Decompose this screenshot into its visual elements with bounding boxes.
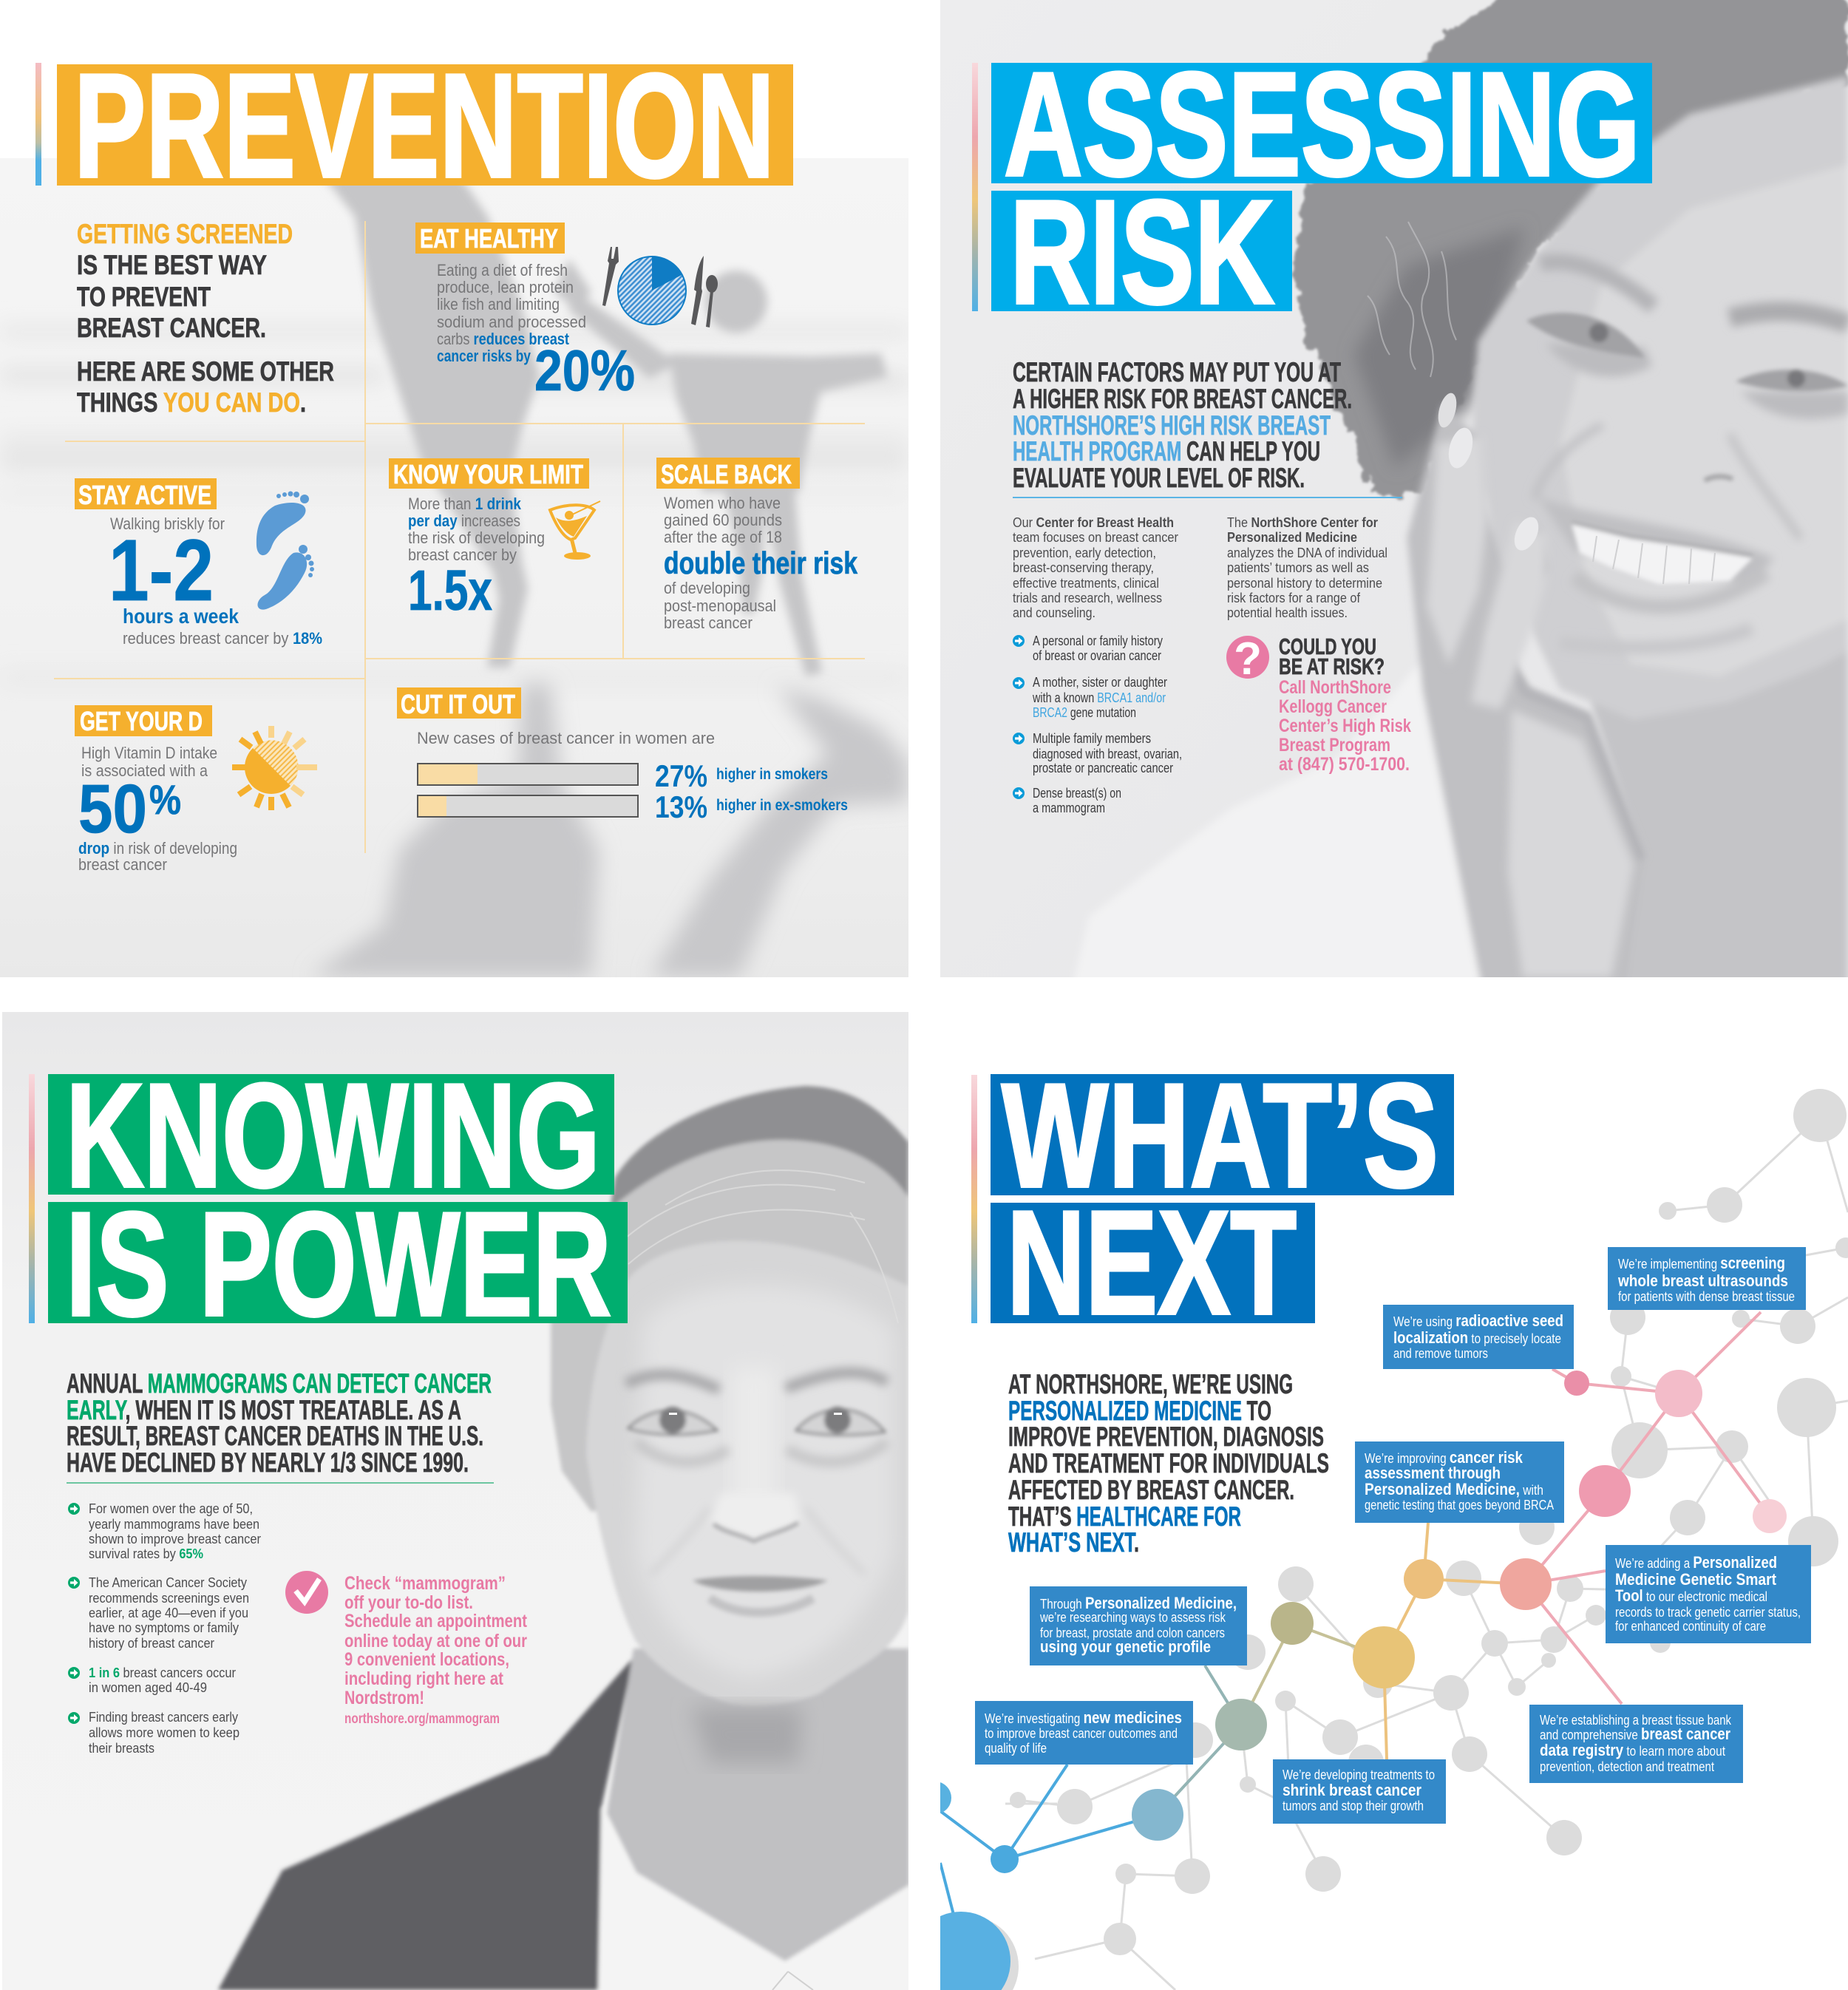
panel: knowing is power	[2, 1012, 909, 1990]
list: risk factors: Multiple family members	[1033, 731, 1151, 746]
callout: screening ultrasounds: whole breast ultrasounds	[1617, 1271, 1788, 1290]
callout: genetic profile	[1030, 1586, 1247, 1665]
heading: mammograms	[67, 1368, 494, 1484]
intro text: IS THE BEST WAY	[77, 250, 267, 280]
section: scale back: Women who have	[664, 494, 781, 512]
text: center for personalized medicine	[1227, 515, 1387, 620]
text: center for breast health: trials and research, wellness	[1013, 591, 1162, 605]
callout: genetic smart tool: for enhanced continuity of care	[1615, 1619, 1766, 1634]
photo: older woman portrait	[2, 1012, 909, 1990]
section: scale back: gained 60 pounds	[664, 511, 782, 529]
callout: genetic profile: we’re researching ways to assess risk	[1039, 1610, 1226, 1625]
list: risk factors: A mother, sister or daughter	[1033, 675, 1167, 690]
list: risk factors: BRCA2 gene mutation	[1033, 705, 1136, 720]
section: scale back: breast cancer	[664, 614, 753, 632]
section: stay active: STAY ACTIVE	[78, 480, 211, 510]
callout: radioactive seed: We’re using radioactive seed	[1393, 1311, 1563, 1330]
callout: genetic smart tool: records to track genetic carrier status,	[1615, 1605, 1801, 1620]
callout: new medicines: to improve breast cancer outcomes and	[985, 1726, 1178, 1741]
list: mammogram facts: The American Cancer Society	[89, 1575, 247, 1590]
section: stay active: hours a week	[123, 605, 239, 628]
callout: could you be at risk: Breast Program	[1279, 735, 1390, 755]
list: mammogram facts: For women over the age of 50,	[89, 1501, 253, 1516]
section: get your d: High Vitamin D intake	[81, 744, 217, 762]
section: know your limit: 1.5x	[408, 559, 492, 622]
section: cut it out: New cases of breast cancer in women are	[417, 729, 715, 747]
section: eat healthy: Eating a diet of fresh	[437, 261, 568, 279]
text: center for personalized medicine: The NorthShore Center for	[1227, 515, 1378, 530]
text: center for breast health: breast-conserving therapy,	[1013, 560, 1154, 575]
title: assessing risk	[972, 42, 1652, 335]
callout: radioactive seed: and remove tumors	[1393, 1346, 1488, 1361]
intro text: GETTING SCREENED	[77, 219, 293, 249]
bar chart: smokers and ex-smokers	[418, 764, 638, 817]
heading: personalized medicine: AND TREATMENT FOR INDIVIDUALS	[1008, 1448, 1329, 1478]
section: know your limit: breast cancer by	[408, 546, 517, 564]
panel: assessing risk	[940, 0, 1848, 991]
icon: footprints	[257, 491, 314, 610]
list: mammogram facts: recommends screenings even	[89, 1591, 249, 1606]
section: cut it out: CUT IT OUT	[401, 689, 515, 719]
callout: could you be at risk: BE AT RISK?	[1279, 653, 1385, 679]
callout: data registry: data registry to learn more about	[1540, 1741, 1725, 1759]
callout: data registry: prevention, detection and treatment	[1540, 1759, 1714, 1774]
heading: personalized medicine: PERSONALIZED MEDICINE TO	[1008, 1396, 1271, 1426]
callout: cancer risk assessment: We’re improving cancer risk	[1365, 1448, 1523, 1467]
section: cut it out: 27%	[655, 758, 707, 793]
section: stay active	[75, 478, 322, 648]
callout: radioactive seed	[1383, 1305, 1574, 1369]
callout: schedule a mammogram	[285, 1571, 528, 1727]
heading: risk factors: A HIGHER RISK FOR BREAST CANCER.	[1013, 384, 1352, 414]
callout: genetic profile: Through Personalized Medicine,	[1040, 1594, 1237, 1612]
list: mammogram facts: shown to improve breast cancer	[89, 1532, 261, 1546]
list: mammogram facts: 1 in 6 breast cancers occur	[89, 1665, 236, 1680]
section: eat healthy	[415, 223, 718, 403]
title: knowing is power: IS POWER	[66, 1182, 611, 1347]
list: risk factors: of breast or ovarian cancer	[1033, 648, 1161, 663]
intro text: TO PREVENT	[77, 282, 211, 312]
text: center for breast health: prevention, early detection,	[1013, 546, 1156, 560]
icon: sun	[232, 726, 317, 810]
callout: genetic smart tool: We’re adding a Personalized	[1615, 1553, 1777, 1572]
heading: risk factors: NORTHSHORE’S HIGH RISK BREAST	[1013, 410, 1331, 441]
heading: personalized medicine: WHAT’S NEXT.	[1008, 1527, 1139, 1558]
text: center for breast health: Our Center for Breast Health	[1013, 515, 1174, 530]
callout: new medicines: quality of life	[985, 1741, 1047, 1756]
list: risk factors: prostate or pancreatic cancer	[1033, 761, 1173, 775]
heading: personalized medicine: AFFECTED BY BREAST CANCER.	[1008, 1475, 1294, 1505]
callout: screening ultrasounds	[1608, 1247, 1806, 1310]
section: eat healthy: 20%	[534, 338, 635, 403]
list: mammogram facts: survival rates by 65%	[89, 1546, 203, 1561]
section: eat healthy: sodium and processed	[437, 313, 586, 331]
text: center for breast health: effective treatments, clinical	[1013, 576, 1159, 591]
icon: plate with fork, knife and spoon	[602, 247, 718, 327]
section: cut it out: 13%	[655, 789, 707, 824]
intro text: BREAST CANCER.	[77, 313, 266, 343]
list: mammogram facts: Finding breast cancers early	[89, 1710, 238, 1725]
section: eat healthy: carbs reduces breast	[437, 330, 570, 348]
section: cut it out: higher in ex-smokers	[716, 797, 848, 814]
section: eat healthy: EAT HEALTHY	[420, 223, 558, 254]
callout: shrink breast cancer: tumors and stop their growth	[1283, 1799, 1424, 1813]
title: what's next	[971, 1053, 1454, 1345]
list: risk factors: Dense breast(s) on	[1033, 786, 1121, 801]
text: center for personalized medicine: personal history to determine	[1227, 576, 1382, 591]
callout: schedule a mammogram: Nordstrom!	[344, 1688, 424, 1708]
panel: what's next	[911, 1053, 1848, 1990]
list: mammogram facts: earlier, at age 40—even if you	[89, 1606, 248, 1620]
section: know your limit: KNOW YOUR LIMIT	[393, 459, 583, 489]
callout: shrink breast cancer	[1273, 1759, 1446, 1824]
callout: radioactive seed: localization to precisely locate	[1393, 1328, 1561, 1347]
list: mammogram facts	[68, 1501, 261, 1756]
list: risk factors: diagnosed with breast, ovarian,	[1033, 747, 1182, 761]
callout: schedule a mammogram: northshore.org/mammogram	[344, 1711, 500, 1727]
heading: mammograms: HAVE DECLINED BY NEARLY 1/3 SINCE 1990.	[67, 1447, 469, 1478]
list: risk factors: with a known BRCA1 and/or	[1032, 690, 1166, 705]
callout: schedule a mammogram: 9 convenient locations,	[344, 1649, 509, 1670]
section: know your limit: the risk of developing	[408, 529, 545, 547]
text: center for personalized medicine: patients’ tumors as well as	[1227, 560, 1369, 575]
callout: cancer risk assessment	[1355, 1441, 1564, 1523]
callout: data registry: and comprehensive breast cancer	[1540, 1725, 1730, 1743]
list: risk factors: a mammogram	[1033, 801, 1105, 815]
section: stay active: Walking briskly for	[110, 515, 225, 533]
text: center for personalized medicine: potential health issues.	[1227, 605, 1348, 620]
section: get your d: GET YOUR D	[80, 706, 203, 736]
callout: could you be at risk	[1226, 634, 1411, 775]
heading: risk factors: EVALUATE YOUR LEVEL OF RISK.	[1013, 463, 1305, 493]
text: center for personalized medicine: Personalized Medicine	[1227, 530, 1357, 545]
heading: risk factors: HEALTH PROGRAM CAN HELP YOU	[1013, 436, 1320, 466]
heading: mammograms: RESULT, BREAST CANCER DEATHS IN THE U.S.	[67, 1421, 483, 1451]
callout: genetic smart tool	[1606, 1545, 1811, 1643]
heading: personalized medicine: THAT’S HEALTHCARE FOR	[1008, 1501, 1241, 1532]
text: center for breast health: and counseling.	[1013, 605, 1095, 620]
callout: genetic profile: for breast, prostate and colon cancers	[1040, 1626, 1225, 1640]
list: mammogram facts: have no symptoms or family	[89, 1620, 239, 1635]
callout: schedule a mammogram: Check “mammogram”	[344, 1573, 506, 1594]
photo: smiling woman	[940, 0, 1848, 991]
list: mammogram facts: yearly mammograms have been	[89, 1517, 259, 1532]
section: know your limit: More than 1 drink	[408, 495, 522, 513]
title: knowing is power: KNOWING	[66, 1053, 600, 1218]
section: get your d: breast cancer	[78, 855, 167, 874]
title: what's next: WHAT’S	[1002, 1053, 1438, 1218]
section: scale back: SCALE BACK	[661, 459, 792, 489]
callout: screening ultrasounds: for patients with dense breast tissue	[1618, 1289, 1795, 1304]
icon: martini glass	[550, 501, 600, 560]
list: risk factors	[1013, 634, 1182, 815]
list: mammogram facts: their breasts	[89, 1741, 154, 1756]
callout: shrink breast cancer: shrink breast cancer	[1283, 1781, 1421, 1799]
callout: schedule a mammogram: Schedule an appointment	[344, 1611, 528, 1631]
section: eat healthy: cancer risks by	[437, 347, 531, 365]
title: assessing risk: RISK	[1010, 170, 1274, 335]
intro text	[77, 219, 334, 418]
section: scale back: double their risk	[664, 546, 858, 580]
title: knowing is power	[29, 1053, 628, 1347]
callout: could you be at risk: Call NorthShore	[1279, 677, 1391, 698]
callout: data registry	[1529, 1705, 1743, 1783]
callout: genetic smart tool: Tool to our electronic medical	[1615, 1586, 1767, 1605]
section: scale back: post-menopausal	[664, 597, 776, 615]
section: get your d: is associated with a	[81, 761, 208, 780]
section: cut it out	[397, 687, 848, 824]
heading: mammograms: ANNUAL MAMMOGRAMS CAN DETECT CANCER	[67, 1368, 492, 1399]
callout: shrink breast cancer: We’re developing treatments to	[1283, 1767, 1435, 1782]
section: stay active: reduces breast cancer by 18%	[123, 629, 322, 648]
callout: schedule a mammogram: off your to-do list.	[344, 1592, 473, 1613]
heading: risk factors: CERTAIN FACTORS MAY PUT YOU AT	[1013, 357, 1341, 387]
section: eat healthy: produce, lean protein	[437, 278, 574, 296]
callout: could you be at risk: ?	[1234, 634, 1262, 685]
callout: cancer risk assessment: assessment through	[1365, 1464, 1501, 1482]
text: center for breast health: team focuses on breast cancer	[1013, 530, 1178, 545]
callout: genetic smart tool: Medicine Genetic Smart	[1615, 1570, 1777, 1589]
title: assessing risk: ASSESSING	[1004, 42, 1640, 207]
section: cut it out: higher in smokers	[716, 766, 828, 783]
callout: new medicines	[975, 1701, 1193, 1765]
section: scale back	[656, 458, 858, 632]
section: know your limit	[389, 458, 600, 622]
heading: personalized medicine: IMPROVE PREVENTION, DIAGNOSIS	[1008, 1422, 1324, 1452]
callout: cancer risk assessment: Personalized Medicine, with	[1365, 1480, 1543, 1498]
section: get your d: %	[149, 776, 181, 823]
section: scale back: after the age of 18	[664, 528, 782, 546]
section: eat healthy: like fish and limiting	[437, 295, 560, 313]
title: prevention: PREVENTION	[74, 44, 775, 208]
callout: data registry: We’re establishing a breast tissue bank	[1540, 1713, 1732, 1728]
list: risk factors: A personal or family history	[1033, 634, 1163, 648]
network diagram	[911, 1089, 1848, 1990]
callout: schedule a mammogram: including right here at	[344, 1668, 504, 1689]
heading: mammograms: EARLY, WHEN IT IS MOST TREATABLE. AS A	[67, 1395, 461, 1425]
section: get your d: 50	[78, 770, 147, 847]
intro text: THINGS YOU CAN DO.	[77, 387, 306, 418]
list: mammogram facts: allows more women to keep	[89, 1725, 240, 1740]
heading: personalized medicine: AT NORTHSHORE, WE’RE USING	[1008, 1369, 1293, 1399]
panel: prevention	[0, 44, 908, 977]
section: know your limit: per day increases	[408, 512, 520, 530]
callout: could you be at risk: COULD YOU	[1279, 634, 1376, 659]
section: get your d: drop in risk of developing	[78, 839, 237, 858]
callout: cancer risk assessment: genetic testing that goes beyond BRCA	[1365, 1498, 1554, 1512]
callout: screening ultrasounds: We’re implementing screening	[1618, 1254, 1785, 1272]
heading: risk factors	[1013, 357, 1402, 498]
callout: could you be at risk: Center’s High Risk	[1279, 716, 1411, 736]
title: what's next: NEXT	[1007, 1181, 1297, 1345]
list: mammogram facts: in women aged 40-49	[89, 1680, 207, 1695]
list: mammogram facts: history of breast cancer	[89, 1636, 214, 1651]
callout: new medicines: We’re investigating new medicines	[985, 1708, 1182, 1727]
text: center for personalized medicine: analyzes the DNA of individual	[1227, 546, 1387, 560]
section: scale back: of developing	[664, 579, 750, 597]
text: center for breast health	[1013, 515, 1178, 620]
callout: could you be at risk: at (847) 570-1700.	[1279, 754, 1410, 775]
text: center for personalized medicine: risk factors for a range of	[1227, 591, 1361, 605]
intro text: HERE ARE SOME OTHER	[77, 356, 334, 387]
heading: personalized medicine	[1008, 1369, 1329, 1558]
callout: genetic profile: using your genetic profile	[1040, 1637, 1211, 1656]
section: get your d	[75, 705, 317, 874]
section: stay active: 1-2	[109, 522, 214, 619]
photo: children jumping on a beach	[0, 158, 908, 977]
dividers	[54, 221, 865, 853]
callout: schedule a mammogram: online today at one of our	[344, 1631, 527, 1651]
callout: could you be at risk: Kellogg Cancer	[1279, 696, 1387, 717]
